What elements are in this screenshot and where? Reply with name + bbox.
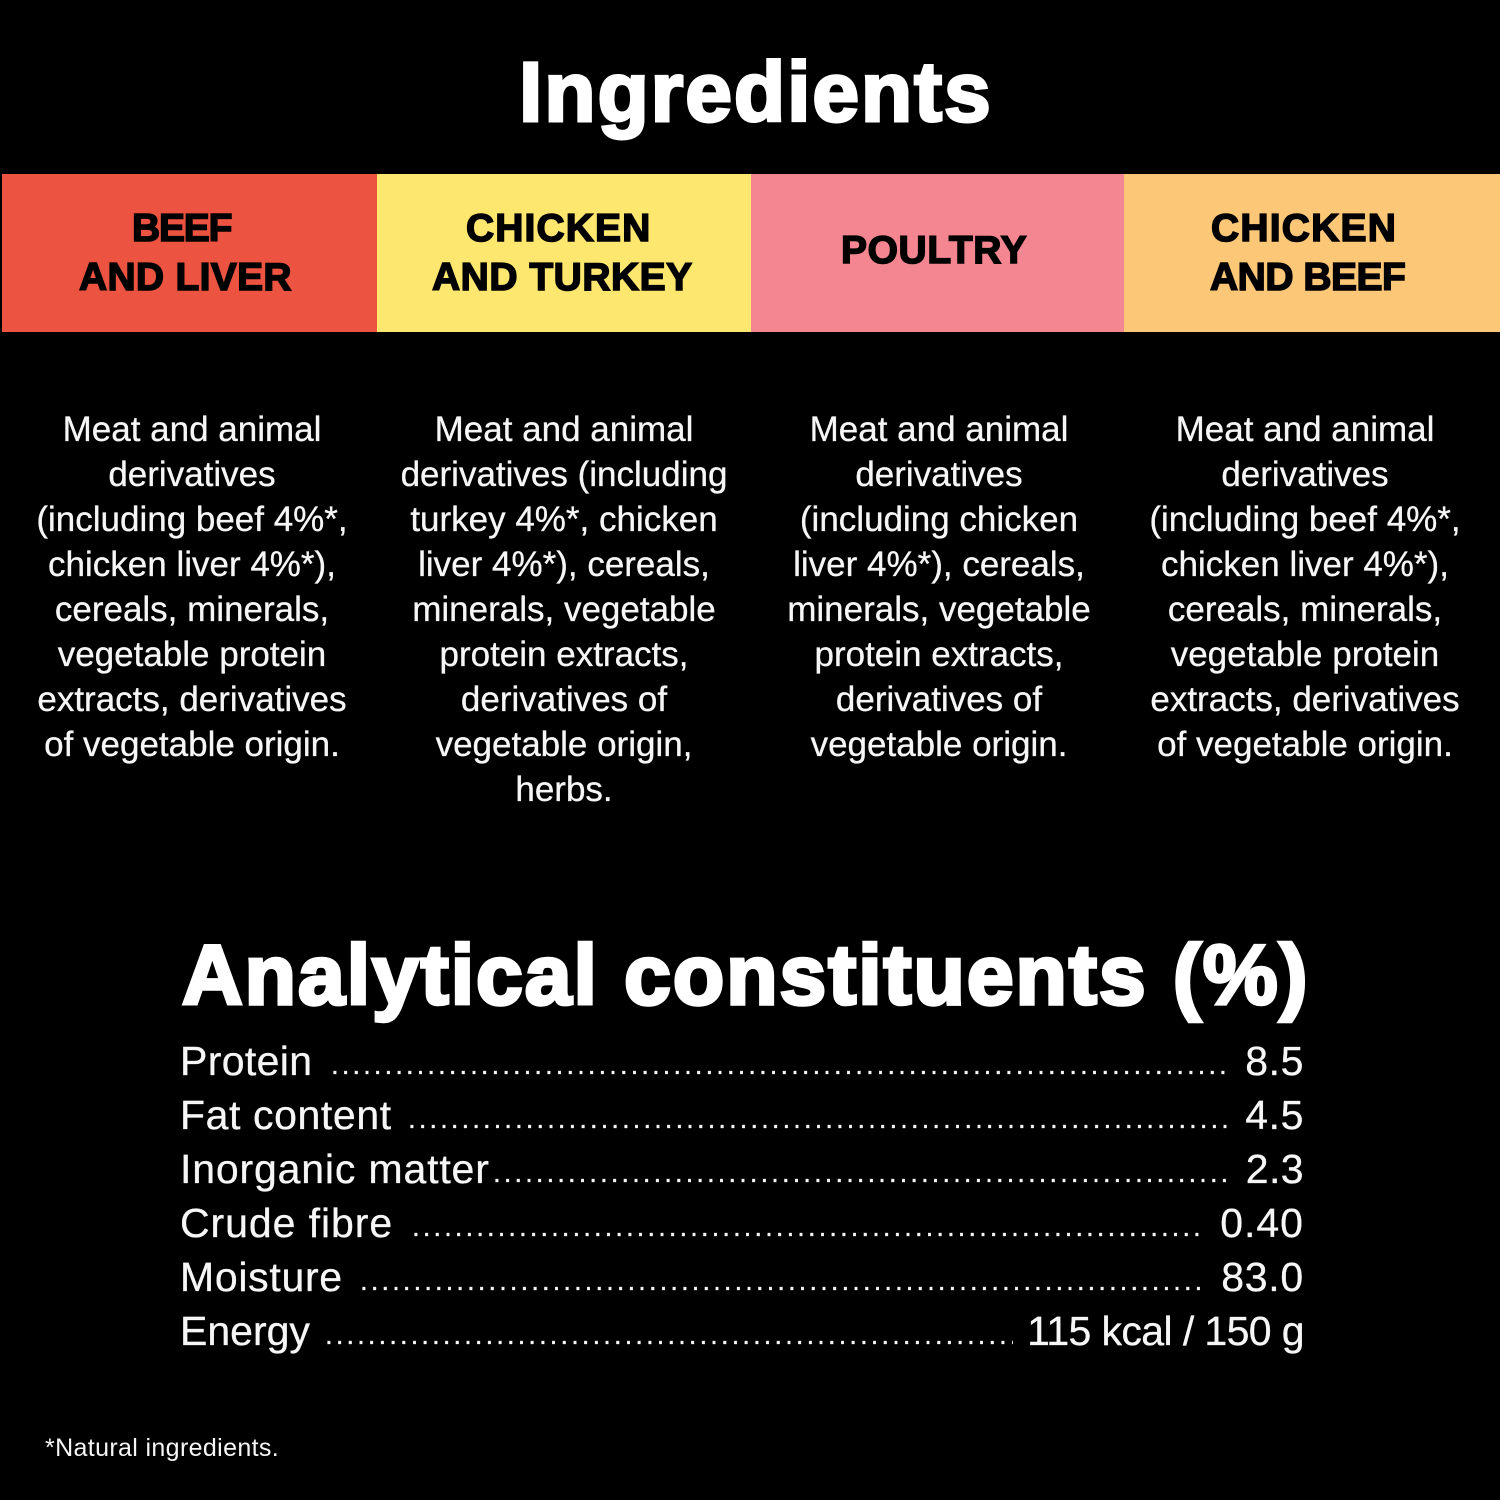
band: beef and liver <box>2 174 377 332</box>
text block: chicken and beef ingredients: Meat and animal <box>1176 410 1434 449</box>
row: energy: 115 kcal / 150 g <box>1027 1308 1304 1354</box>
band: chicken and beef: AND BEEF <box>1210 256 1405 299</box>
table: analytical constituents <box>180 1038 1304 1354</box>
row: crude fibre <box>180 1200 1304 1246</box>
row: moisture <box>180 1254 1304 1300</box>
row: inorganic matter: 2.3 <box>1246 1146 1304 1192</box>
row: energy <box>180 1308 1304 1354</box>
row: protein: Protein <box>180 1038 312 1084</box>
text block: beef and liver ingredients: extracts, derivatives <box>37 680 347 719</box>
text block: chicken and beef ingredients: (including beef 4%*, <box>1149 500 1461 539</box>
text block: beef and liver ingredients: Meat and animal <box>63 410 321 449</box>
band: beef and liver: BEEF <box>132 207 231 250</box>
text block: poultry ingredients: derivatives of <box>836 680 1042 719</box>
row: protein: 8.5 <box>1245 1038 1304 1084</box>
band: poultry: POULTRY <box>841 229 1027 272</box>
row: inorganic matter: Inorganic matter <box>180 1146 490 1192</box>
text block: chicken and beef ingredients: derivatives <box>1221 455 1389 494</box>
text block: chicken and turkey ingredients: protein extracts, <box>440 635 688 674</box>
row: fat content: Fat content <box>180 1092 392 1138</box>
row: inorganic matter <box>180 1146 1304 1192</box>
row: fat content <box>180 1092 1304 1138</box>
text block: beef and liver ingredients: (including beef 4%*, <box>36 500 348 539</box>
text block: chicken and beef ingredients: extracts, derivatives <box>1150 680 1460 719</box>
text block: beef and liver ingredients: derivatives <box>108 455 276 494</box>
row: crude fibre: Crude fibre <box>180 1200 393 1246</box>
band: poultry <box>751 174 1124 332</box>
text block: poultry ingredients: vegetable origin. <box>811 725 1067 764</box>
panel: flavour header bands <box>2 174 1500 332</box>
band: chicken and turkey: CHICKEN <box>466 207 651 250</box>
row: protein <box>180 1038 1304 1084</box>
text block: poultry ingredients: (including chicken <box>800 500 1078 539</box>
text block: beef and liver ingredients: cereals, minerals, <box>55 590 329 629</box>
text block: poultry ingredients <box>787 410 1091 764</box>
band: chicken and turkey: AND TURKEY <box>432 256 693 299</box>
row: moisture: 83.0 <box>1221 1254 1304 1300</box>
text block: chicken and beef ingredients: chicken liver 4%*), <box>1161 545 1449 584</box>
text block: chicken and turkey ingredients: Meat and animal <box>435 410 693 449</box>
heading: Analytical constituents: Analytical constituents (%) <box>182 928 1310 1022</box>
text block: chicken and beef ingredients: cereals, minerals, <box>1168 590 1442 629</box>
text block: poultry ingredients: liver 4%*), cereals, <box>793 545 1085 584</box>
text block: beef and liver ingredients: vegetable protein <box>58 635 326 674</box>
title: Ingredients: Ingredients <box>519 45 993 139</box>
text block: chicken and turkey ingredients: turkey 4%*, chicken <box>410 500 718 539</box>
text block: chicken and beef ingredients <box>1149 410 1461 764</box>
text block: chicken and beef ingredients: of vegetable origin. <box>1157 725 1453 764</box>
text block: poultry ingredients: Meat and animal <box>810 410 1068 449</box>
text block: chicken and turkey ingredients: derivatives of <box>461 680 667 719</box>
text block: chicken and turkey ingredients: minerals, vegetable <box>412 590 716 629</box>
band: beef and liver: AND LIVER <box>79 256 292 299</box>
band: chicken and turkey <box>377 174 751 332</box>
band: chicken and beef: CHICKEN <box>1211 207 1397 250</box>
text block: chicken and turkey ingredients <box>401 410 727 809</box>
footnote: *Natural ingredients. <box>45 1434 279 1462</box>
text block: chicken and turkey ingredients: herbs. <box>515 770 613 809</box>
text block: chicken and turkey ingredients: derivatives (including <box>401 455 727 494</box>
text block: beef and liver ingredients: chicken liver 4%*), <box>48 545 336 584</box>
text block: beef and liver ingredients: of vegetable origin. <box>44 725 340 764</box>
text block: poultry ingredients: derivatives <box>855 455 1023 494</box>
text block: poultry ingredients: protein extracts, <box>814 635 1064 674</box>
row: crude fibre: 0.40 <box>1220 1200 1304 1246</box>
row: moisture: Moisture <box>180 1254 343 1300</box>
row: fat content: 4.5 <box>1245 1092 1304 1138</box>
text block: chicken and beef ingredients: vegetable protein <box>1171 635 1439 674</box>
text block: beef and liver ingredients <box>36 410 348 764</box>
text block: poultry ingredients: minerals, vegetable <box>787 590 1091 629</box>
text block: chicken and turkey ingredients: liver 4%*), cereals, <box>418 545 710 584</box>
row: energy: Energy <box>180 1308 310 1354</box>
text block: chicken and turkey ingredients: vegetable origin, <box>436 725 692 764</box>
band: chicken and beef <box>1124 174 1500 332</box>
